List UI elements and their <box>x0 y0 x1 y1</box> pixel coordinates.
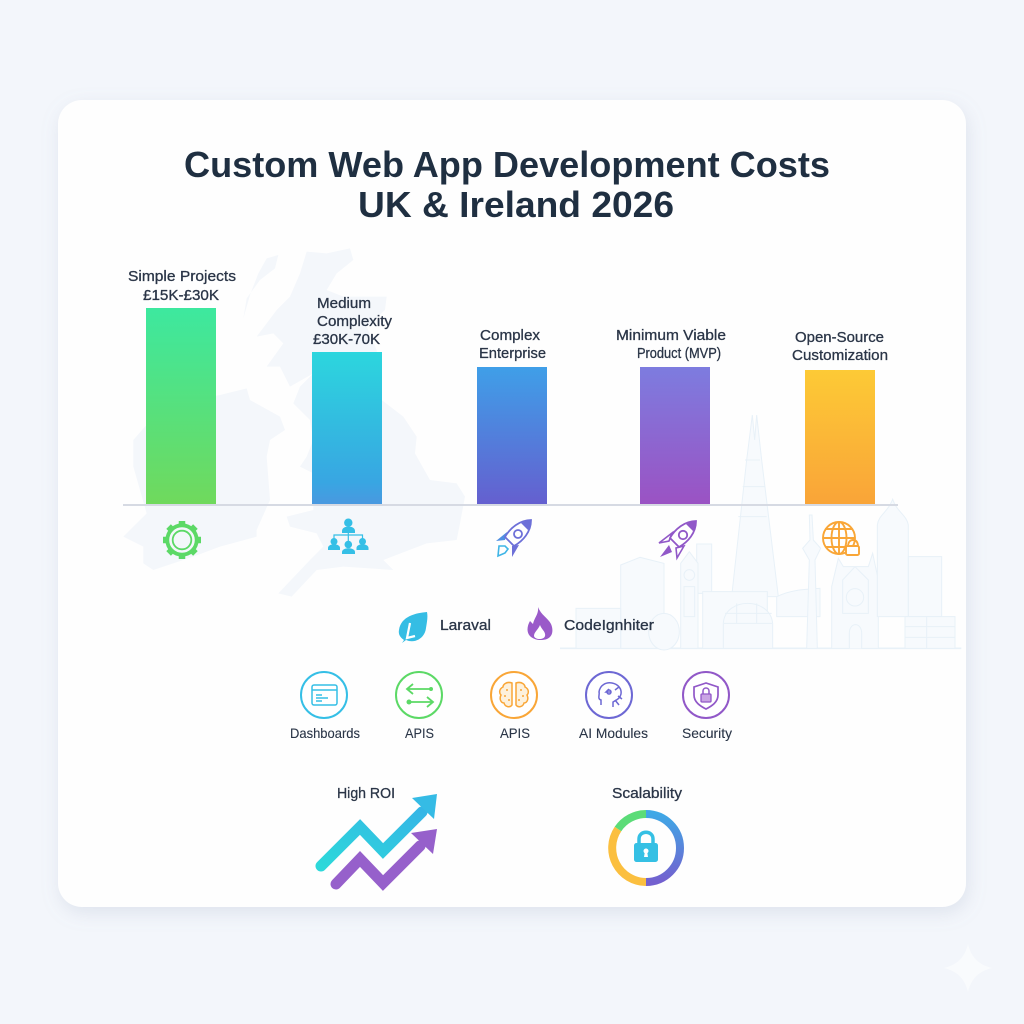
bar label: MVP <box>616 327 726 362</box>
scalability: Scalability <box>612 785 683 802</box>
bar label: open-source customization: Open-Source <box>795 329 884 346</box>
axis line <box>123 504 898 506</box>
bar label: open-source customization <box>792 329 888 364</box>
legend: CodeIgniter <box>528 607 654 640</box>
bar label: simple projects: Simple Projects <box>128 268 236 285</box>
bar label: simple projects: £15K-£30K <box>143 287 219 304</box>
icon: gear <box>163 521 201 559</box>
icon: ring <box>612 814 680 882</box>
bar label: medium complexity: Medium <box>317 295 371 312</box>
icon: rocket, purple <box>659 521 696 558</box>
bar: MVP <box>640 367 710 505</box>
bar: complex enterprise <box>477 367 547 505</box>
bar label: simple projects <box>128 268 236 304</box>
bar: medium complexity <box>312 352 382 505</box>
bar label: medium complexity: £30K-70K <box>313 331 380 348</box>
bar label: MVP: Minimum Viable <box>616 327 726 344</box>
bar label: complex enterprise: Complex <box>480 327 541 344</box>
legend: Laraval <box>399 612 491 643</box>
title: Custom Web App Development Costs <box>184 144 830 185</box>
feature: AI Modules: AI Modules <box>579 725 648 741</box>
legend: CodeIgniter: CodeIgnhiter <box>564 617 654 634</box>
title: UK & Ireland 2026 <box>358 184 674 225</box>
bar label: complex enterprise <box>479 327 546 362</box>
bar: open-source customization <box>805 370 875 505</box>
scalability <box>612 785 683 882</box>
feature: APIS, brain: APIS <box>500 725 530 741</box>
feature: Security <box>682 672 732 741</box>
bar label: open-source customization: Customization <box>792 347 888 364</box>
feature: Dashboards <box>290 672 360 741</box>
icon: padlock <box>634 832 658 862</box>
bar: simple projects <box>146 308 216 505</box>
bar chart: cost by project type <box>123 308 898 506</box>
title <box>184 144 830 225</box>
feature: Security: Security <box>682 725 732 741</box>
bar label: MVP: Product (MVP) <box>637 345 721 362</box>
high ROI <box>321 785 437 884</box>
background skyline: London <box>560 415 961 650</box>
feature: AI Modules <box>579 672 648 741</box>
icon: cyan arrow <box>321 794 437 866</box>
feature: APIS, arrows <box>396 672 442 741</box>
icon: rocket, blue <box>496 520 531 557</box>
icon: globe with lock <box>823 522 859 555</box>
panel: main card <box>58 100 966 907</box>
icon: org chart <box>328 518 368 554</box>
legend: Laraval: Laraval <box>440 617 491 634</box>
high ROI: High ROI <box>337 785 395 802</box>
bar label: medium complexity: Complexity <box>317 313 393 330</box>
feature: Dashboards: Dashboards <box>290 725 360 741</box>
background map: UK and Ireland <box>123 248 465 597</box>
icon: purple arrow <box>336 829 437 884</box>
feature: APIS, brain <box>491 672 537 741</box>
icon: corner sparkle <box>944 944 992 992</box>
feature: APIS, arrows: APIS <box>405 725 434 741</box>
bar label: medium complexity <box>313 295 393 348</box>
bar label: complex enterprise: Enterprise <box>479 345 546 362</box>
